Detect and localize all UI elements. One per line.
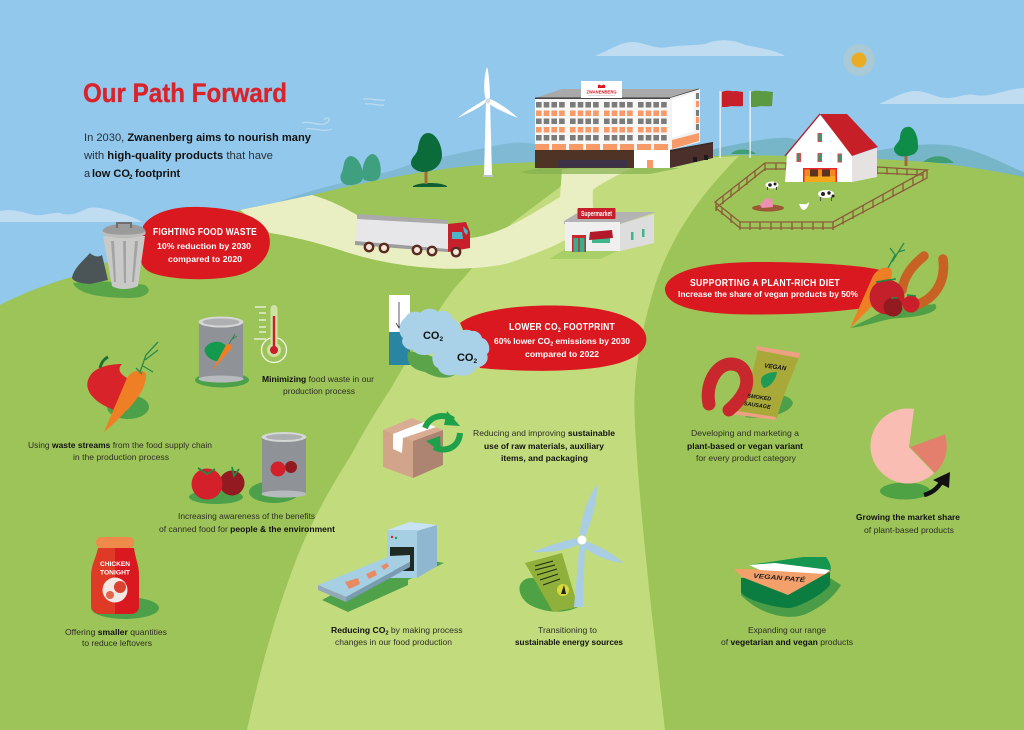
panel: fighting food waste: compared to 2020 [168, 255, 243, 264]
icon: pepper and carrot [87, 342, 158, 432]
heading: FIGHTING FOOD WASTE [153, 227, 257, 238]
icon: tomatoes and can [189, 432, 306, 504]
company sign: ZWANENBERG [586, 90, 617, 94]
heading: LOWER CO [509, 322, 566, 333]
clouds [0, 40, 1024, 222]
flags [720, 91, 773, 158]
supermarket [549, 208, 656, 259]
supermarket sign: Supermarket [581, 211, 612, 218]
label: sustainable energy: Transitioning to [538, 625, 597, 635]
intro text: 2 [129, 174, 133, 181]
label: canned food awareness: of canned food for people & the environment [159, 524, 335, 534]
intro text: In 2030, Zwanenberg aims to nourish many [84, 132, 312, 144]
icon: thermometer [254, 305, 286, 362]
factory building [520, 81, 713, 174]
label: reducing CO2: changes in our food production [335, 637, 452, 647]
label: raw materials and packaging: items, and packaging [501, 453, 588, 463]
building shadow [520, 168, 680, 174]
chicken [799, 202, 809, 210]
icon: chicken tonight jar: CHICKEN [100, 561, 130, 568]
veg shadow [850, 304, 936, 328]
icon: wind turbine and green certificate [519, 485, 623, 612]
label: plant-based variant: Developing and marketing a [691, 428, 799, 438]
pie chart icon [870, 409, 950, 500]
intro text [83, 132, 312, 181]
red blob [665, 262, 880, 315]
panel: lower CO2 footprint [389, 295, 646, 378]
CO2 clouds: 2 [439, 336, 443, 343]
label: plant-based variant [687, 428, 803, 463]
icon: trash can [72, 223, 149, 298]
icon: vegan sausage pack: SMOKED [747, 393, 771, 403]
target text: Increase the share of vegan products by 50% [678, 290, 858, 299]
target text: 2 [550, 342, 553, 348]
light green road [247, 156, 739, 730]
label: vegetarian and vegan range [721, 625, 853, 647]
label: raw materials and packaging [473, 428, 615, 463]
level gauge [389, 295, 410, 365]
panel: lower CO2 footprint: compared to 2022 [525, 350, 600, 359]
label: waste streams: Using waste streams from the food supply chain [28, 440, 212, 450]
label: canned food awareness: Increasing awareness of the benefits [178, 511, 315, 521]
wind turbine [458, 67, 518, 177]
cream road [240, 168, 632, 269]
label: minimizing food waste: production process [283, 386, 355, 396]
target text: 60% lower CO [494, 337, 547, 346]
label: raw materials and packaging: Reducing and improving sustainable [473, 428, 615, 438]
distant hills [270, 138, 1024, 210]
icon: chicken tonight jar: TONIGHT [100, 570, 130, 576]
panel: supporting a plant-rich diet [665, 243, 943, 328]
label: reducing CO2 [331, 625, 463, 647]
hills [0, 155, 1024, 730]
icon: vegan pate tin: VEGAN PATÉ [753, 571, 806, 584]
company sign [581, 81, 622, 98]
label: vegetarian and vegan range: Expanding our range [748, 625, 826, 635]
title: Our Path Forward [83, 78, 287, 108]
target text: emissions by 2030 [553, 337, 631, 346]
label: plant-based variant: for every product category [696, 453, 797, 463]
label: minimizing food waste [262, 374, 374, 396]
farm fence [715, 163, 927, 230]
icon: vegan sausage pack [708, 346, 800, 420]
label: plant-based variant: plant-based or vegan variant [687, 441, 803, 451]
barn [785, 114, 878, 182]
label: reducing CO2: by making process [388, 625, 463, 635]
icon: chicken tonight jar [91, 537, 159, 619]
sausages [902, 256, 943, 307]
intro text: low CO [92, 168, 130, 180]
icon: conveyor machine [318, 522, 444, 612]
tree [411, 133, 447, 187]
wind swirls [302, 99, 385, 130]
heading: FOOTPRINT [561, 322, 615, 333]
CO2 clouds: 2 [473, 358, 477, 365]
icon: vegan sausage pack: SAUSAGE [743, 401, 771, 411]
label: reducing CO2: 2 [385, 630, 388, 636]
CO2 clouds: CO [457, 352, 473, 364]
tomatoes [870, 280, 904, 314]
label: waste streams [28, 440, 212, 462]
label: minimizing food waste: Minimizing food waste in our [262, 374, 374, 384]
sun [843, 44, 875, 76]
label: market share: Growing the market share [856, 512, 960, 522]
label: smaller quantities [65, 627, 167, 648]
CO2 clouds [399, 309, 489, 376]
label: waste streams: in the production process [73, 452, 169, 462]
label: reducing CO2: Reducing CO [331, 625, 386, 635]
label: raw materials and packaging: use of raw materials, auxiliary [484, 441, 604, 451]
red blob [141, 207, 270, 279]
farm tree [894, 127, 918, 166]
pig in mud [752, 198, 784, 212]
label: canned food awareness [159, 511, 335, 534]
intro text: with high-quality products that have [83, 150, 273, 162]
label: sustainable energy: sustainable energy sources [515, 637, 623, 647]
intro text: footprint [135, 168, 181, 180]
label: market share: of plant-based products [864, 525, 954, 535]
truck [355, 214, 470, 256]
icon: vegan pate tin [734, 557, 841, 617]
label: smaller quantities: Offering smaller quantities [65, 627, 167, 637]
farm animals [752, 182, 834, 212]
label: sustainable energy [515, 625, 623, 647]
label: market share [856, 512, 960, 535]
shadow [549, 250, 620, 259]
cow one [766, 182, 778, 190]
icon: can with pepper and carrot [195, 316, 249, 388]
panel: fighting food waste [141, 207, 270, 279]
label: smaller quantities: to reduce leftovers [82, 638, 152, 648]
red blob [460, 306, 646, 371]
icon: vegan sausage pack: VEGAN [764, 363, 787, 373]
heading: SUPPORTING A PLANT-RICH DIET [690, 278, 840, 289]
intro text: a [84, 168, 91, 180]
icon: cardboard box with recycling arrows [383, 411, 460, 478]
heading: 2 [558, 328, 561, 334]
green shadow [407, 352, 458, 378]
carrot [850, 267, 892, 328]
target text: 10% reduction by 2030 [157, 242, 252, 251]
label: vegetarian and vegan range: of vegetarian and vegan products [721, 637, 853, 647]
cow two [818, 190, 834, 201]
tree twin shrubs [340, 154, 381, 185]
CO2 clouds: CO [423, 330, 439, 342]
